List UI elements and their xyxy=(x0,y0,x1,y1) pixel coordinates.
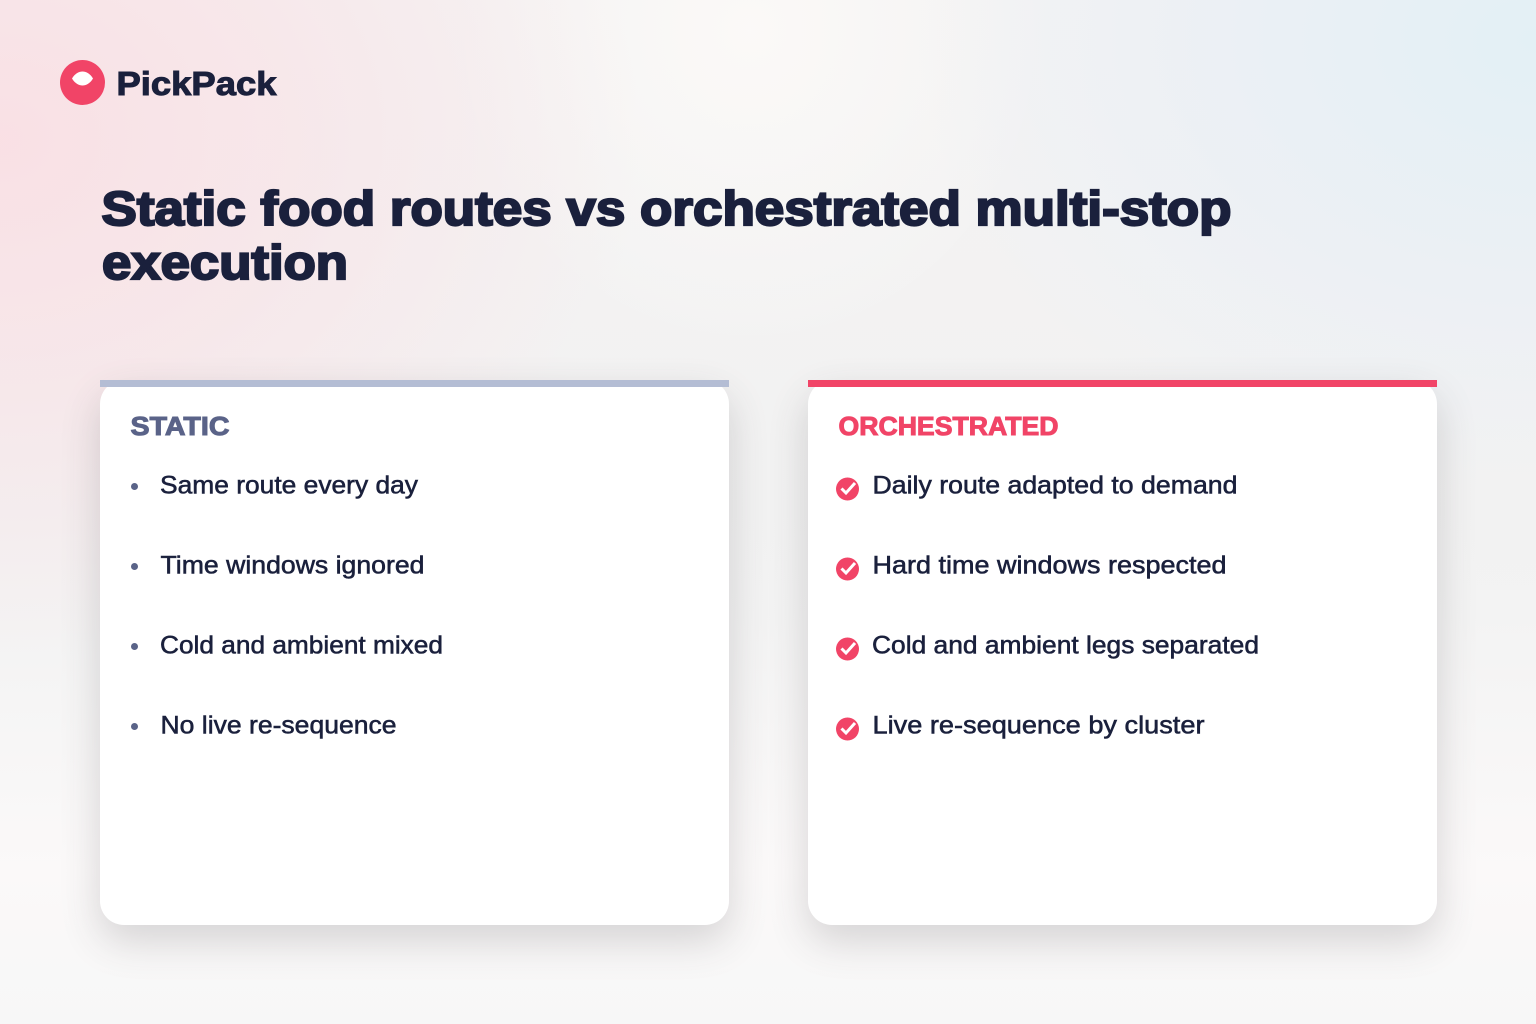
static item 2: Time windows ignored xyxy=(160,552,424,580)
static top bar xyxy=(100,380,729,387)
orchestrated heading: ORCHESTRATED xyxy=(838,411,1059,441)
panel: orchestrated xyxy=(808,380,1437,925)
static item 1: Same route every day xyxy=(160,472,419,500)
brand name: PickPack xyxy=(116,65,277,102)
logo xyxy=(60,60,278,105)
icon: logo mark xyxy=(60,60,105,105)
static item 3: Cold and ambient mixed xyxy=(160,632,443,660)
orchestrated item 1: Daily route adapted to demand xyxy=(872,472,1238,500)
static item 4: No live re-sequence xyxy=(160,712,396,740)
orchestrated item 2: Hard time windows respected xyxy=(872,552,1227,580)
panel: static xyxy=(100,380,729,925)
title xyxy=(102,183,1232,290)
static heading: STATIC xyxy=(130,411,230,441)
static list xyxy=(130,411,443,740)
orchestrated list xyxy=(836,411,1259,740)
orchestrated item 3: Cold and ambient legs separated xyxy=(872,632,1259,660)
title: Static food routes vs orchestrated multi-stop xyxy=(102,183,1232,236)
orchestrated item 4: Live re-sequence by cluster xyxy=(872,712,1204,740)
title: execution xyxy=(102,237,348,290)
orchestrated top bar xyxy=(808,380,1437,387)
